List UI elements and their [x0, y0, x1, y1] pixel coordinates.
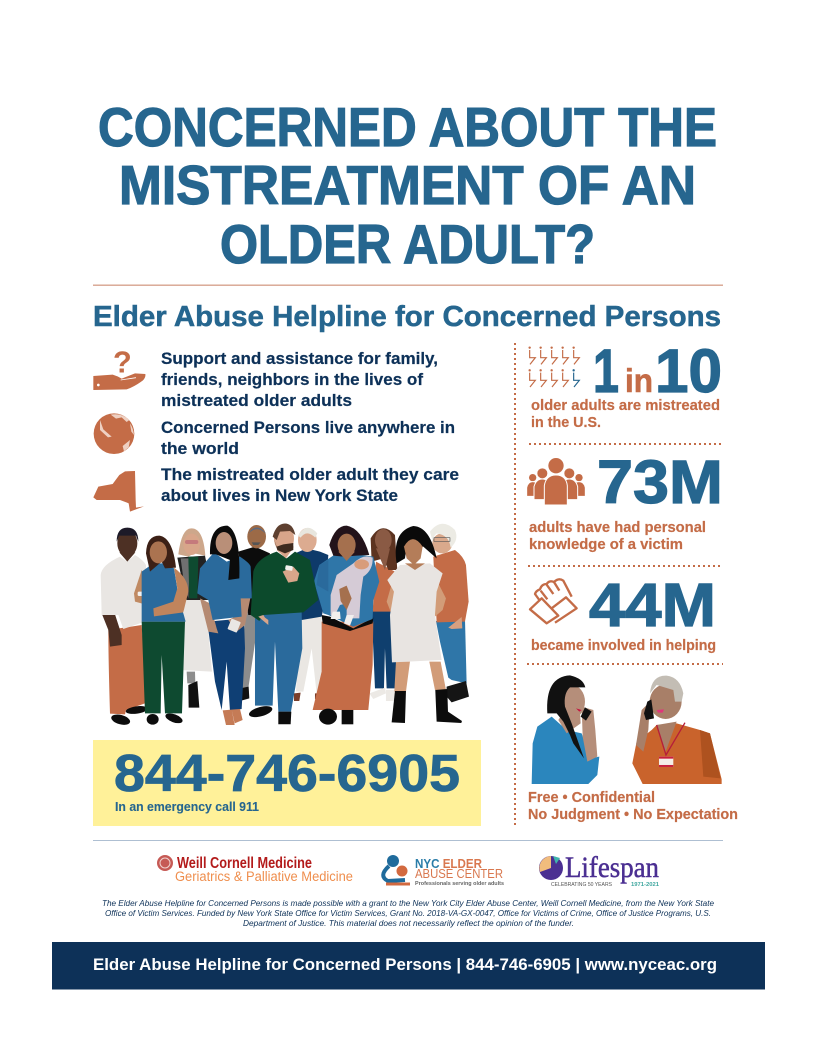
person: woman holding a baby: [313, 526, 379, 725]
text: concerned persons anywhere: Concerned Persons live anywhere in: [161, 418, 455, 437]
person: man in navy shirt with white pants: [294, 528, 328, 701]
funding disclaimer: Office of Victim Services. Funded by New York State Office for Victim Services, Grant No. 2018-VA-GX-0047, Office for Victims of Crime, Office of Justice Programs, U.S.: [105, 909, 711, 918]
text: support and assistance: mistreated older adults: [161, 391, 352, 410]
panel: who the helpline serves: [93, 345, 459, 512]
icon: hand with question mark: ?: [113, 345, 132, 379]
text: concerned persons anywhere: [161, 418, 455, 458]
funding disclaimer: [102, 899, 715, 928]
caption: 1 in 10: older adults are mistreated: [531, 397, 720, 414]
phone number box: [93, 740, 481, 826]
subheading: Elder Abuse Helpline for Concerned Persons: [93, 301, 721, 333]
caption: 73M: [529, 519, 706, 553]
stat: 1 in 10: [528, 337, 722, 431]
emergency note: In an emergency call 911: [115, 799, 259, 814]
person: woman in white dress: [387, 526, 462, 723]
tagline: No Judgment • No Expectation: [528, 806, 738, 823]
logo: Weill Cornell Medicine: [157, 855, 353, 884]
icon: group of people: [527, 458, 585, 505]
logo: Lifespan: [539, 851, 659, 888]
stat: 44M: [530, 571, 716, 654]
title: OLDER ADULT?: [220, 213, 595, 275]
icon: clasped hands: [530, 579, 577, 623]
caption: 73M: knowledge of a victim: [529, 536, 683, 553]
text: support and assistance: [161, 349, 438, 410]
person: man in green sweater with beard: [248, 524, 318, 724]
stat: 73M: 73M: [597, 448, 723, 516]
illustration: two women talking on the phone: [532, 675, 722, 784]
footer bar: Elder Abuse Helpline for Concerned Persons | 844-746-6905 | www.nyceac.org: [93, 956, 717, 974]
tagline: [528, 789, 738, 823]
logo: Lifespan: Lifespan: [565, 851, 659, 884]
logo: NYC Elder Abuse Center: Professionals serving older adults: [415, 881, 504, 887]
caption: 1 in 10: [531, 397, 720, 431]
title: CONCERNED ABOUT THE: [98, 96, 717, 158]
stat: 1 in 10: in: [625, 362, 653, 399]
logo: NYC Elder Abuse Center: ABUSE CENTER: [415, 866, 503, 881]
logo: NYC Elder Abuse Center: NYC ELDER: [415, 856, 483, 871]
caption: 44M: became involved in helping: [531, 637, 716, 654]
icon: New York State map: [93, 471, 144, 512]
text: older adult in New York: The mistreated older adult they care: [161, 465, 459, 484]
caption: 73M: adults have had personal: [529, 519, 706, 536]
footer bar: [52, 942, 765, 990]
person: woman in blue sleeveless top and green pants: [134, 536, 188, 725]
person: man in white sweater: [101, 528, 148, 727]
tagline: Free • Confidential: [528, 789, 655, 806]
stat: 1 in 10: 1: [593, 337, 619, 405]
logo: Lifespan: CELEBRATING 50 YEARS: [551, 882, 612, 888]
illustration: group of diverse adults: [101, 524, 469, 727]
icon: globe: [94, 413, 134, 454]
title: [98, 96, 717, 275]
logo: Weill Cornell Medicine: Geriatrics & Palliative Medicine: [175, 869, 353, 884]
person: woman in orange top: [369, 528, 398, 701]
caption: 1 in 10: in the U.S.: [531, 414, 601, 431]
person: older man in black shirt: [238, 525, 270, 701]
person: older woman far right: [430, 524, 469, 702]
funding disclaimer: The Elder Abuse Helpline for Concerned Persons is made possible with a grant to the New York City Elder Abuse Center, Weill Cornell Medicine, from the New York State: [102, 899, 715, 908]
stat: 1 in 10: 10: [655, 337, 722, 405]
text: support and assistance: friends, neighbors in the lives of: [161, 370, 423, 389]
icon: hand with question mark: [93, 345, 145, 390]
title: MISTREATMENT OF AN: [119, 154, 696, 216]
text: support and assistance: Support and assistance for family,: [161, 349, 438, 368]
text: older adult in New York: [161, 465, 459, 505]
stat: 44M: 44M: [589, 571, 716, 639]
dotted column divider: [514, 343, 516, 828]
stat: 73M: [527, 448, 723, 553]
text: older adult in New York: about lives in New York State: [161, 486, 398, 505]
logo: Lifespan: 1971-2021: [631, 882, 659, 888]
helpline phone number: 844-746-6905: [114, 745, 460, 803]
person: woman in blue shirt and navy jeans: [197, 526, 252, 725]
woman caller in blue: [532, 675, 599, 784]
funding disclaimer: Department of Justice. This material does not necessarily reflect the opinion of the funder.: [243, 919, 574, 928]
icon: ten people, one highlighted: [528, 346, 579, 387]
logo: NYC Elder Abuse Center: [383, 855, 504, 887]
text: concerned persons anywhere: the world: [161, 439, 239, 458]
woman responder in orange: [632, 676, 722, 784]
person: blonde woman: [177, 528, 212, 708]
logo: Weill Cornell Medicine: Weill Cornell Medicine: [177, 855, 312, 872]
